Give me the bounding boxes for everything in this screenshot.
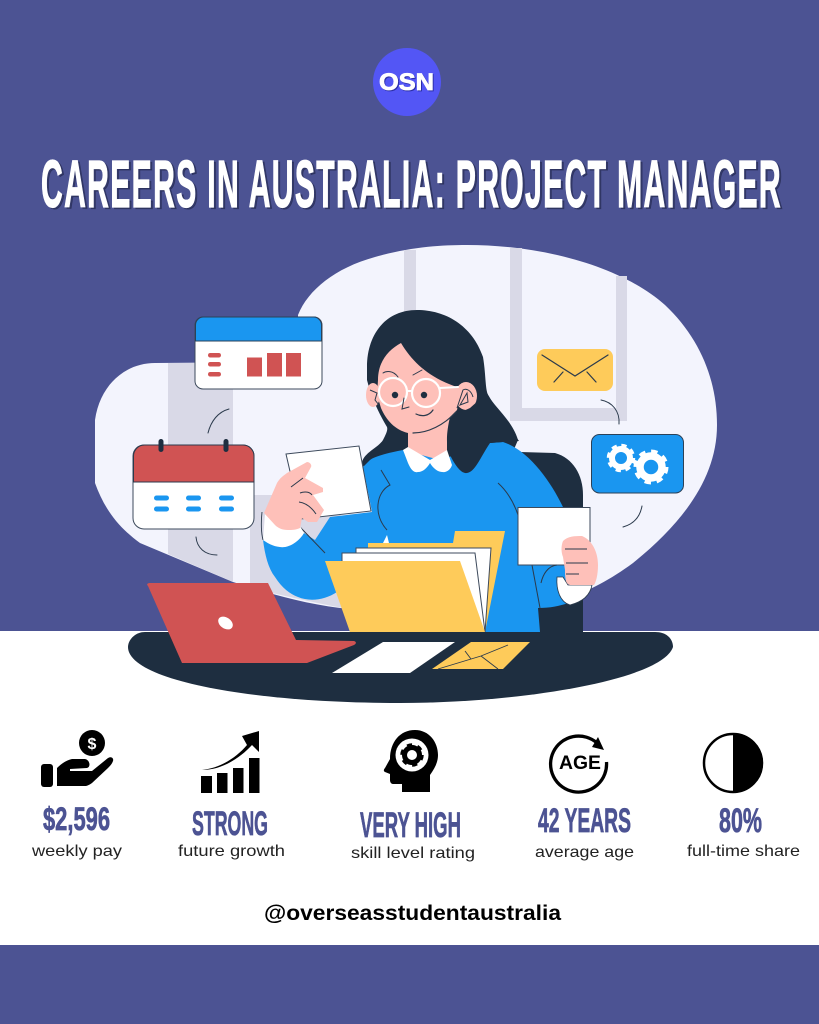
settings gears panel [592, 434, 684, 493]
office chair [520, 452, 583, 632]
social handle: @overseasstudentaustralia [264, 902, 561, 925]
ear lines [370, 389, 473, 408]
collar [403, 447, 452, 472]
value: STRONG [192, 805, 268, 843]
icon: head with gear [384, 730, 438, 792]
icon: age cycle: AGE [559, 753, 601, 774]
stat: skill level rating [351, 730, 475, 862]
stat: full-time share [687, 733, 800, 860]
paper on desk [332, 642, 455, 673]
label: average age [535, 844, 634, 861]
stat: weekly pay [31, 730, 122, 860]
icon: half circle [704, 733, 763, 793]
left hand [261, 462, 324, 547]
value: $2,596 [43, 801, 110, 837]
connector curves [196, 400, 642, 555]
right hand [541, 536, 598, 605]
shirt triangle [383, 535, 389, 543]
stat: future growth [178, 731, 285, 860]
label: future growth [178, 843, 285, 860]
face details [379, 370, 458, 433]
logo: OSN [379, 69, 434, 96]
value: 42 YEARS [538, 802, 631, 840]
hair front lock [447, 393, 519, 473]
background blob [95, 245, 717, 612]
right hand paper [518, 508, 590, 565]
label: full-time share [687, 843, 800, 860]
stat: average age [535, 736, 634, 861]
label: weekly pay [31, 843, 122, 860]
logo [373, 48, 441, 116]
laptop [147, 583, 356, 663]
left hand paper [286, 446, 371, 519]
hair back [362, 310, 518, 472]
folder [325, 531, 505, 632]
neck and face [377, 343, 462, 458]
value: VERY HIGH [360, 806, 461, 845]
illustration: project manager at desk [95, 245, 717, 703]
icon: growth chart [201, 731, 260, 793]
woman [263, 310, 590, 632]
value: 80% [719, 802, 762, 840]
chart window panel [195, 317, 322, 389]
right ear [455, 382, 477, 410]
calendar [133, 439, 254, 529]
left ear [366, 383, 380, 407]
envelope icon [537, 349, 613, 391]
sweater lines [300, 470, 540, 608]
envelope on desk [432, 642, 530, 669]
window frames [168, 248, 627, 608]
desk [128, 632, 673, 703]
label: skill level rating [351, 845, 475, 862]
icon: hand holding coin: $ [88, 736, 97, 753]
white lower band [0, 631, 819, 945]
blue sweater [263, 442, 590, 632]
logo: OSN [380, 70, 435, 97]
